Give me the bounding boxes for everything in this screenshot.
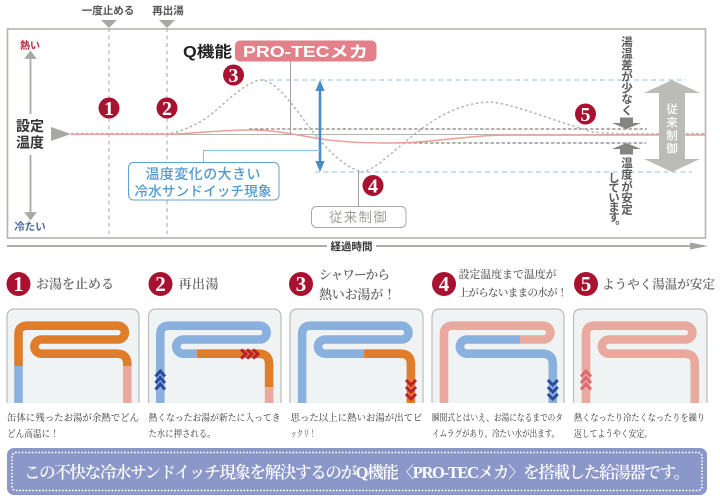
axis: elapsed time: 経過時間 <box>330 240 372 253</box>
step 4 caption: 瞬間式とはいえ、お湯になるまでのタ <box>432 412 563 424</box>
curve: Q function temperature <box>71 130 706 143</box>
arrow: conventional control range <box>644 80 700 172</box>
step 5 caption <box>574 412 705 440</box>
marker 2 <box>156 98 178 120</box>
step 5 caption: 返してようやく安定。 <box>574 428 652 440</box>
step 3 heading: 熱いお湯が！ <box>319 287 396 302</box>
step 2 heading: 再出湯 <box>178 276 218 292</box>
marker 3: 3 <box>228 65 238 87</box>
label: hot: 熱い <box>20 39 40 52</box>
arrow: conventional control range: 制 <box>666 130 678 142</box>
step 3 pipe panel <box>290 309 423 403</box>
marker: set temperature triangle <box>51 127 71 141</box>
note: small temperature gap: 湯温差が少なく <box>620 35 633 116</box>
step 4 heading: 設定温度まで温度が <box>458 267 556 281</box>
line: set temperature base <box>71 134 706 136</box>
step 1 pipe panel <box>7 309 139 403</box>
banner: conclusion <box>7 448 707 495</box>
marker: stop time line <box>101 20 117 234</box>
step 4 heading: 上がらないままの水が！ <box>458 286 568 299</box>
step 3 heading: 3 <box>296 272 306 296</box>
note: stable temperature: しています。 <box>607 172 620 232</box>
arrow: conventional control range: 来 <box>666 116 678 130</box>
label: PRO-TEC mecha: PRO-TECメカ <box>243 43 368 61</box>
leader: Q function label <box>290 61 292 134</box>
step 5 heading: 5 <box>581 272 591 296</box>
step 2 <box>148 272 281 440</box>
label: stop once: 一度止める <box>82 4 134 17</box>
arrow: conventional control range: 御 <box>666 142 678 156</box>
label: set temperature: 温度 <box>16 134 44 150</box>
step 4 caption: イムラグがあり、冷たい水が出ます。 <box>432 428 559 440</box>
step 3 red chevrons <box>406 380 416 399</box>
step 4 pipe panel <box>432 309 564 403</box>
curve: conventional control temperature <box>71 80 706 172</box>
step 2 red chevrons <box>241 350 258 358</box>
step 2 caption: 熱くなったお湯が新たに入ってき <box>148 412 280 424</box>
label: re-flow: 再出湯 <box>152 4 184 17</box>
arrow: colder <box>26 155 35 219</box>
step 5 pipe panel <box>574 309 707 403</box>
step 4 heading <box>432 267 568 299</box>
step 3 caption <box>290 412 422 440</box>
step 4 blue chevrons <box>548 380 558 399</box>
step 3 heading: シャワーから <box>319 268 390 282</box>
marker 4 <box>362 175 384 197</box>
banner: conclusion: この不快な冷水サンドイッチ現象を解決するのがQ機能〈PRO-TECメカ〉を搭載した給湯器です。 <box>24 463 690 482</box>
note: small temperature gap <box>612 35 641 129</box>
step 2 pipe panel <box>148 309 281 403</box>
step 3 caption: 思った以上に熱いお湯が出てビ <box>290 412 422 424</box>
step 5 <box>574 272 715 440</box>
step 5 heading <box>574 272 715 296</box>
range lines: conventional control <box>260 80 692 172</box>
range lines: Q function <box>249 129 647 143</box>
step 2 blue chevrons <box>156 371 165 390</box>
note: stable temperature: 温度が安定 <box>620 156 633 216</box>
step 3 <box>289 268 423 440</box>
step 1 caption: どん高温に！ <box>7 428 59 440</box>
step 2 caption <box>148 412 280 440</box>
step 1 <box>6 272 139 440</box>
axis: elapsed time <box>7 240 708 253</box>
step 5 caption: 熱くなったり冷たくなったりを繰り <box>574 412 705 424</box>
callout: cold water sandwich: 温度変化の大きい <box>146 166 260 182</box>
step 3 heading <box>289 268 396 302</box>
marker 5 <box>575 104 596 126</box>
marker 3 <box>223 64 244 87</box>
note: stable temperature <box>607 143 641 232</box>
step 2 caption: た水に押される。 <box>148 428 216 440</box>
step 2 heading: 2 <box>155 272 166 296</box>
step 5 heading: ようやく湯温が安定 <box>602 276 715 292</box>
arrow: hotter <box>26 52 35 114</box>
heading: Q function: Q機能 <box>183 42 233 61</box>
step 1 caption: 缶体に残ったお湯が余熱でどん <box>7 412 139 424</box>
step 1 caption <box>7 412 139 440</box>
leader: callout connector <box>204 150 320 162</box>
panel: temperature chart <box>8 4 706 238</box>
marker 1: 1 <box>104 98 114 120</box>
callout: cold water sandwich <box>128 162 279 200</box>
step 4 <box>432 267 568 440</box>
step 1 heading <box>6 272 114 296</box>
label: conventional control: 従来制御 <box>329 210 388 225</box>
step 2 heading <box>148 272 218 296</box>
arrow: conventional control range: 従 <box>666 102 678 116</box>
marker 5: 5 <box>580 104 590 126</box>
arrow: large temperature difference <box>315 80 325 172</box>
label: PRO-TEC mecha <box>235 40 376 62</box>
marker 1 <box>98 98 120 120</box>
step 4 caption <box>432 412 563 440</box>
marker 4: 4 <box>368 175 378 197</box>
leader: conventional control label <box>358 172 360 206</box>
step 1 heading: 1 <box>13 272 24 296</box>
label: cold: 冷たい <box>14 220 46 233</box>
label: conventional control <box>312 206 406 228</box>
step 5 pink chevrons <box>581 371 591 390</box>
marker 2: 2 <box>162 98 172 120</box>
step 1 heading: お湯を止める <box>36 276 114 292</box>
label: set temperature: 設定 <box>16 118 44 134</box>
step 3 caption: ックリ！ <box>290 429 316 440</box>
callout: cold water sandwich: 冷水サンドイッチ現象 <box>134 183 272 199</box>
marker: re-flow time line <box>159 20 175 234</box>
step 4 heading: 4 <box>439 272 450 296</box>
